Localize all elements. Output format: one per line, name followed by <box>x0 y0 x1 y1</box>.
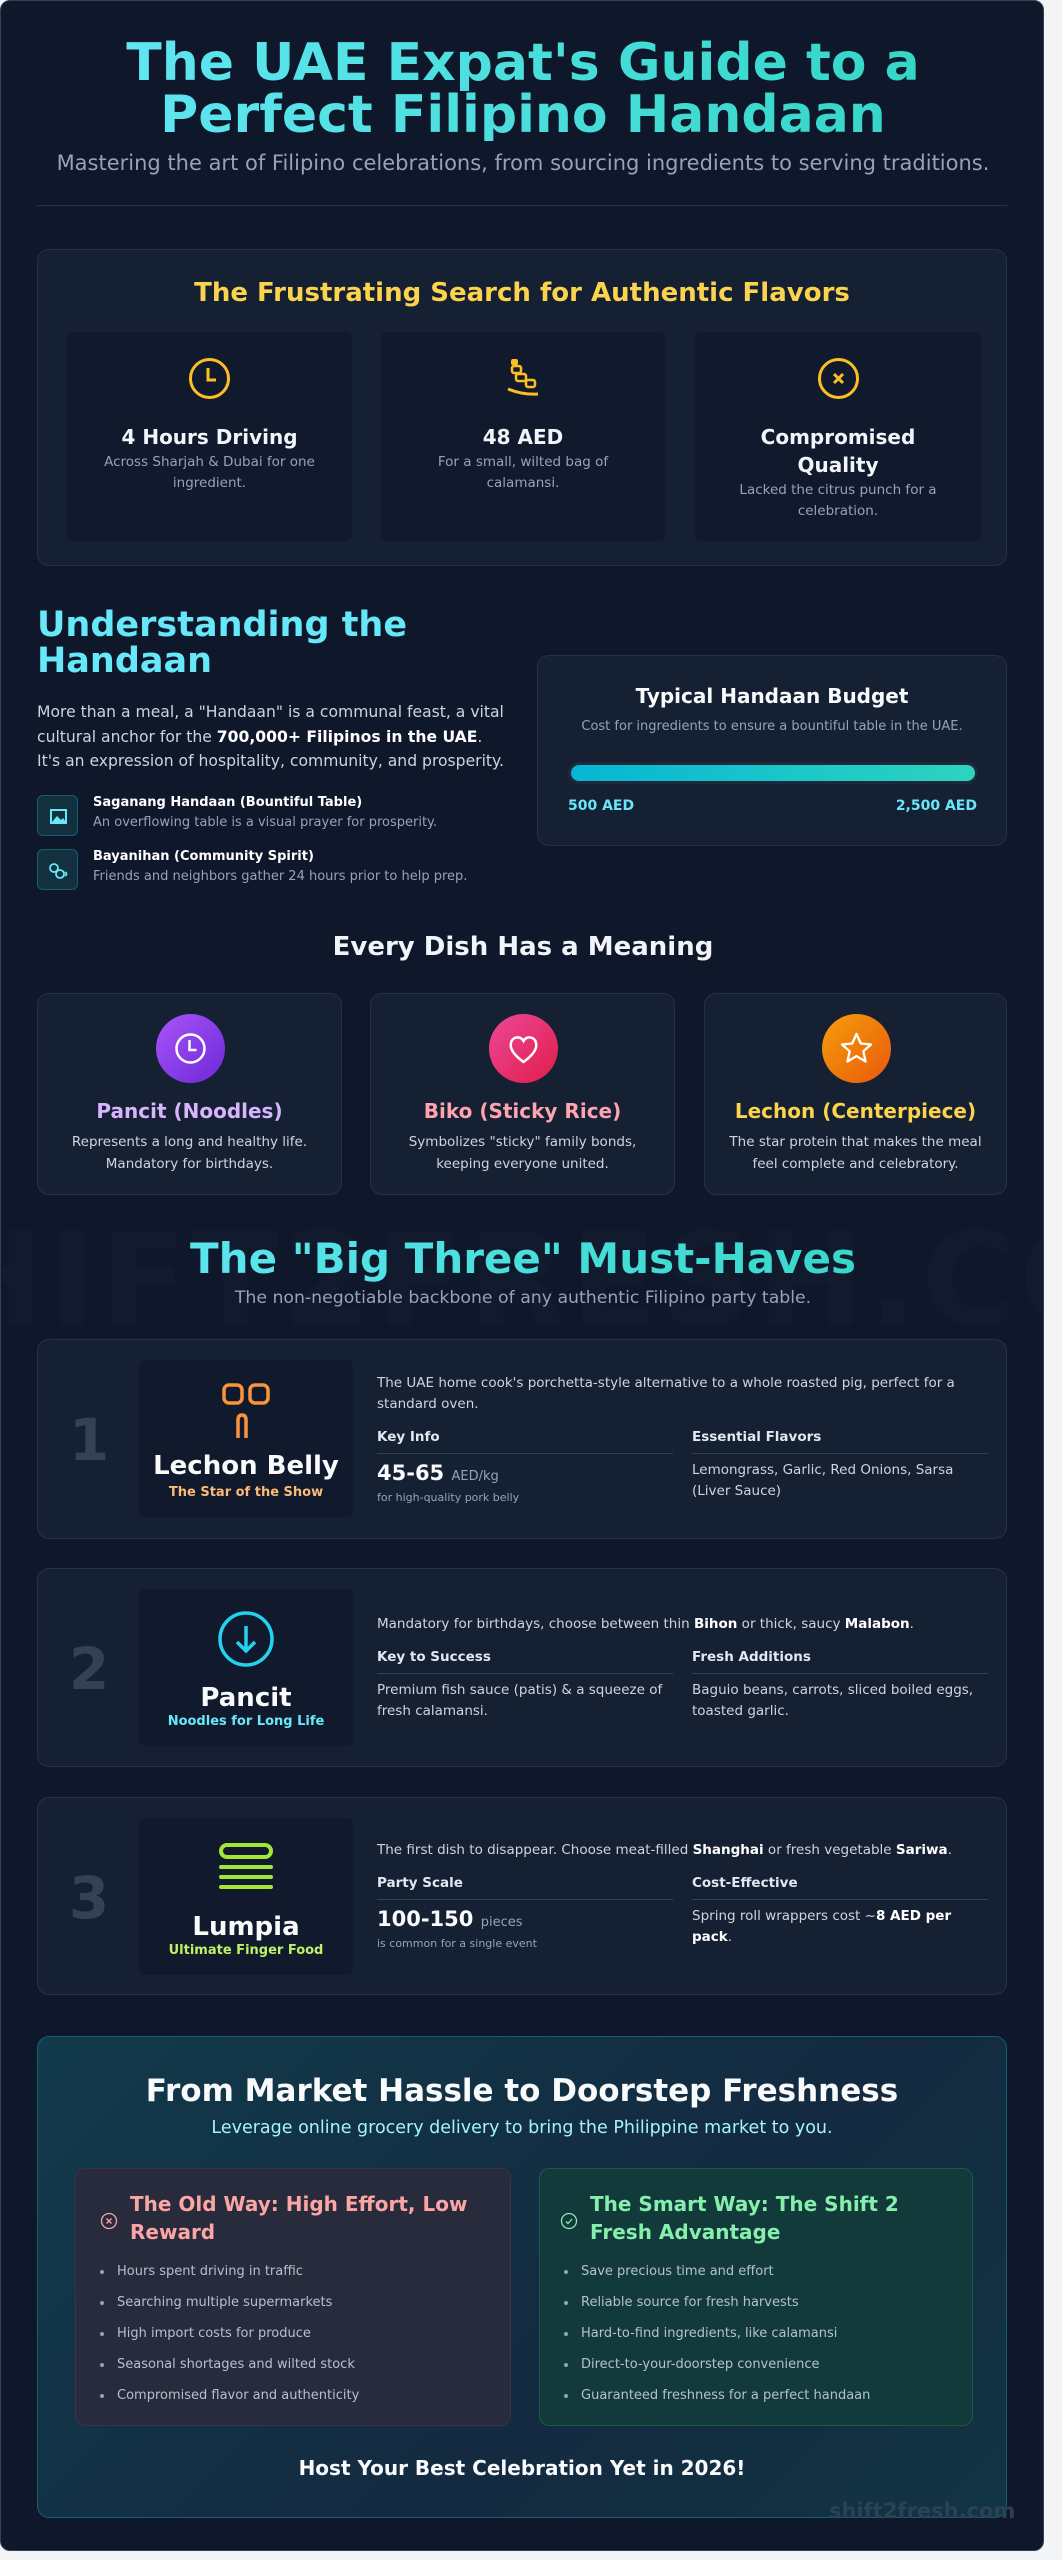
heading: big three <box>1 1233 1045 1285</box>
icon: community <box>37 849 78 890</box>
dish: lechon: Lechon (Centerpiece) <box>735 1099 976 1123</box>
dish: pancit: Pancit (Noodles) <box>96 1099 283 1123</box>
card: lechon belly: 45-65 AED/kg <box>377 1460 499 1484</box>
panel: CTA: Leverage online grocery delivery to bring the Philippine market to you. <box>211 2118 833 2138</box>
old way: Compromised flavor and authenticity <box>117 2388 359 2403</box>
card: lechon belly: for high-quality pork belly <box>377 1490 519 1504</box>
icon: coins <box>508 359 538 396</box>
page container: The non-negotiable backbone of any authentic Filipino party table. <box>235 1288 811 1308</box>
panel: budget: 2,500 AED <box>896 798 977 814</box>
dish: pancit: Represents a long and healthy life. Mandatory for birthdays. <box>72 1134 307 1172</box>
icon: clock circle <box>156 1014 225 1083</box>
card: pancit <box>37 1568 1007 1767</box>
budget title: Typical Handaan Budget <box>636 684 908 708</box>
subtitle: Mastering the art of Filipino celebrations, from sourcing ingredients to serving traditions. <box>57 151 989 175</box>
stat: driving <box>67 332 352 541</box>
card: lumpia: 3 <box>69 1864 109 1932</box>
item: saganang: Saganang Handaan (Bountiful Table) <box>93 795 362 810</box>
title: The UAE Expat's Guide to a <box>126 33 920 93</box>
card: pancit: Fresh Additions <box>692 1648 811 1664</box>
icon: arrow circle <box>218 1611 274 1667</box>
heading: every dish: Every Dish Has a Meaning <box>333 932 713 962</box>
icon: lechon <box>222 1383 270 1438</box>
stat: driving: Across Sharjah & Dubai for one ingredient. <box>104 454 315 491</box>
heading: The Frustrating Search for Authentic Flavors <box>194 278 850 308</box>
panel: CTA <box>37 2036 1007 2518</box>
panel: frustrating search <box>37 249 1007 566</box>
icon: clock <box>189 358 230 399</box>
stat: quality <box>695 332 981 541</box>
dish: biko: Symbolizes "sticky" family bonds, keeping everyone united. <box>409 1134 636 1172</box>
stat: quality: Compromised <box>761 425 915 449</box>
dish: lechon: The star protein that makes the meal feel complete and celebratory. <box>729 1134 982 1172</box>
stat: price: 48 AED <box>483 425 563 449</box>
old way: Searching multiple supermarkets <box>117 2295 332 2310</box>
dish: biko: Biko (Sticky Rice) <box>424 1099 621 1123</box>
icon: check <box>560 2212 578 2230</box>
panel: budget: 500 AED <box>568 798 634 814</box>
card: lumpia: The first dish to disappear. Choose meat-filled Shanghai or fresh vegetable Sariwa. <box>377 1842 952 1858</box>
card: lechon belly: 1 <box>69 1406 109 1474</box>
dish: lechon <box>704 993 1007 1195</box>
item: bayanihan: Friends and neighbors gather 24 hours prior to help prep. <box>93 869 467 884</box>
icon: lumpia rolls <box>219 1843 273 1889</box>
card: pancit: 2 <box>69 1635 109 1703</box>
card: lechon belly: Essential Flavors <box>692 1428 821 1444</box>
card: lumpia: Lumpia <box>192 1912 300 1942</box>
old way: Hours spent driving in traffic <box>117 2264 303 2279</box>
smart way <box>539 2168 973 2426</box>
icon: x circle <box>818 358 859 399</box>
panel: budget <box>537 655 1007 846</box>
icon: heart <box>489 1014 558 1083</box>
card: pancit: Mandatory for birthdays, choose between thin Bihon or thick, saucy Malabon. <box>377 1616 914 1632</box>
closing line: Host Your Best Celebration Yet in 2026! <box>299 2456 745 2480</box>
stat: price <box>381 332 665 541</box>
dish: biko <box>370 993 675 1195</box>
item: saganang: An overflowing table is a visual prayer for prosperity. <box>93 815 437 830</box>
smart way: Guaranteed freshness for a perfect handaan <box>581 2388 870 2403</box>
smart way: Hard-to-find ingredients, like calamansi <box>581 2326 837 2341</box>
title: Perfect Filipino Handaan <box>160 85 886 145</box>
item: bayanihan <box>93 849 467 884</box>
card: lechon belly: Lemongrass, Garlic, Red Onions, Sarsa (Liver Sauce) <box>692 1462 953 1498</box>
card: lumpia <box>37 1797 1007 1995</box>
old way: High import costs for produce <box>117 2326 311 2341</box>
stat: price: For a small, wilted bag of calamansi. <box>438 454 608 491</box>
stat: quality: Quality <box>797 453 879 477</box>
CTA title: From Market Hassle to Doorstep Freshness <box>146 2073 898 2109</box>
stat: driving: 4 Hours Driving <box>121 425 298 449</box>
card: lechon belly: Key Info <box>377 1428 440 1444</box>
card: lechon belly: The Star of the Show <box>169 1485 323 1500</box>
card: pancit: Baguio beans, carrots, sliced boiled eggs, toasted garlic. <box>692 1682 973 1718</box>
smart way: Direct-to-your-doorstep convenience <box>581 2357 819 2372</box>
icon: image <box>37 795 78 836</box>
card: pancit: Noodles for Long Life <box>168 1714 324 1729</box>
panel: budget: Cost for ingredients to ensure a bountiful table in the UAE. <box>581 719 963 734</box>
budget bar <box>568 762 978 784</box>
stat: quality: Lacked the citrus punch for a celebration. <box>739 482 937 519</box>
card: lumpia: Spring roll wrappers cost ~8 AED per pack. <box>692 1908 951 1945</box>
smart way: Save precious time and effort <box>581 2264 774 2279</box>
smart way: The Smart Way: The Shift 2 Fresh Advantage <box>590 2192 899 2244</box>
card: lumpia: 100-150 pieces <box>377 1907 522 1931</box>
heading: understanding: Understanding the Handaan <box>37 605 407 681</box>
item: saganang <box>93 795 437 830</box>
card: pancit: Premium fish sauce (patis) & a squeeze of fresh calamansi. <box>377 1682 662 1718</box>
item: bayanihan: Bayanihan (Community Spirit) <box>93 849 314 864</box>
paragraph: More than a meal, a "Handaan" is a communal feast, a vital cultural anchor for the 700,000+ Filipinos in the UAE. It's an expression of hospitality, community, and prosperity. <box>37 703 504 770</box>
card: lumpia: Cost-Effective <box>692 1875 798 1891</box>
card: lumpia: Party Scale <box>377 1875 463 1891</box>
card: lumpia: Ultimate Finger Food <box>169 1943 323 1958</box>
card: lumpia: is common for a single event <box>377 1937 537 1950</box>
old way: Seasonal shortages and wilted stock <box>117 2357 355 2372</box>
smart way: Reliable source for fresh harvests <box>581 2295 799 2310</box>
card: pancit: Key to Success <box>377 1648 491 1664</box>
old way: The Old Way: High Effort, Low Reward <box>130 2192 467 2244</box>
old way <box>75 2168 511 2426</box>
title <box>1 37 1045 141</box>
icon: x <box>100 2212 118 2230</box>
card: pancit: Pancit <box>200 1683 292 1713</box>
heading: big three: The "Big Three" Must-Haves <box>190 1234 856 1283</box>
card: lechon belly <box>37 1339 1007 1539</box>
dish: pancit <box>37 993 342 1195</box>
watermark: site: shift2fresh.com <box>829 2499 1015 2523</box>
card: lechon belly: Lechon Belly <box>153 1451 339 1481</box>
icon: star <box>822 1014 891 1083</box>
card: lechon belly: The UAE home cook's porchetta-style alternative to a whole roasted pig, perfect for a standard oven. <box>377 1374 955 1412</box>
